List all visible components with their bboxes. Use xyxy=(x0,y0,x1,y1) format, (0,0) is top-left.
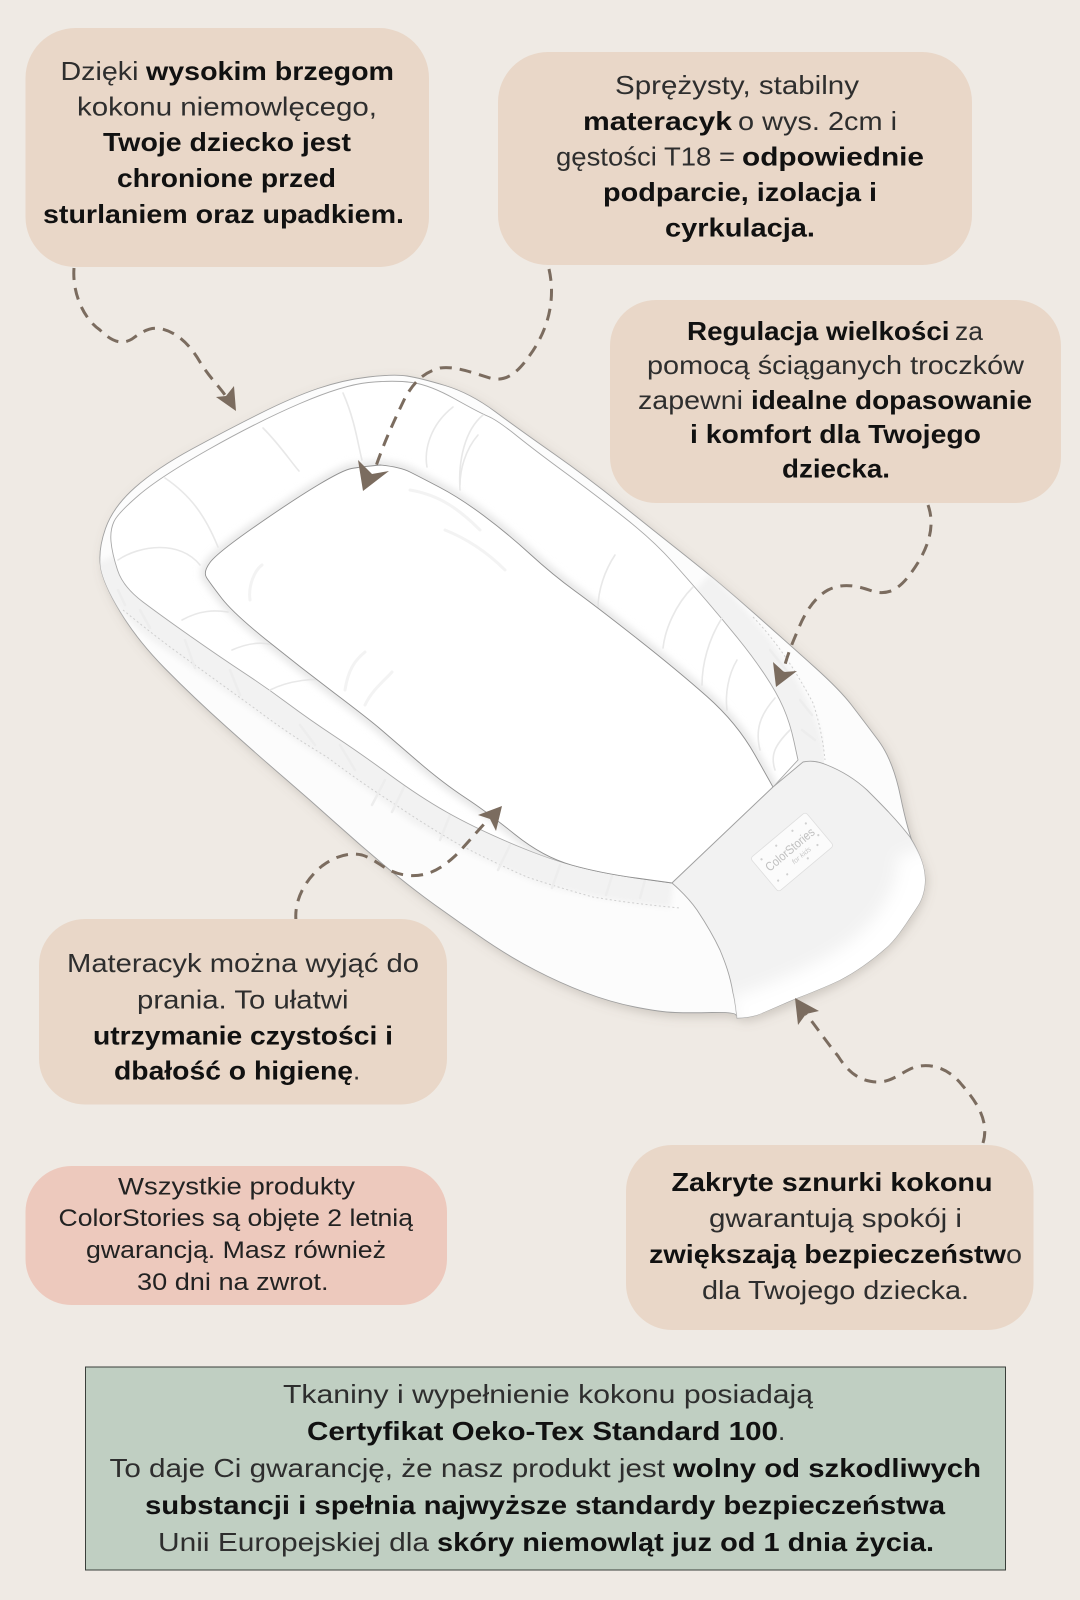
text: mattress: Sprężysty, stabilny xyxy=(615,70,859,100)
text: high edges: kokonu niemowlęcego, xyxy=(77,92,377,122)
text: size regulation xyxy=(638,316,1032,484)
text: hidden strings xyxy=(649,1167,1022,1305)
text: mattress: podparcie, izolacja i xyxy=(603,177,877,207)
text: warranty: Wszystkie produkty xyxy=(118,1174,355,1200)
text: mattress: gęstości T18 = xyxy=(556,142,735,172)
text: washable mattress: dbałość o higienę xyxy=(114,1056,353,1086)
text: washable mattress: Materacyk można wyjąć do xyxy=(67,948,419,978)
arrow: washable mattress callout xyxy=(296,806,502,921)
text: certificate: Unii Europejskiej dla xyxy=(158,1527,430,1557)
stitching xyxy=(123,610,825,908)
text: hidden strings: dla Twojego dziecka. xyxy=(702,1275,969,1305)
text: high edges: wysokim brzegom xyxy=(145,56,394,86)
text: certificate: Certyfikat Oeko-Tex Standard 100 xyxy=(307,1416,778,1446)
panel: warranty xyxy=(26,1166,447,1305)
text: mattress: materacyk xyxy=(583,106,733,136)
arrow: mattress callout to mattress xyxy=(358,269,552,491)
panel: mattress xyxy=(498,52,972,265)
text: high edges: chronione przed xyxy=(117,163,336,193)
panel: size regulation xyxy=(610,300,1061,503)
text: warranty: 30 dni na zwrot. xyxy=(137,1269,328,1296)
text: size regulation: i komfort dla Twojego xyxy=(690,419,981,449)
text: size regulation: zapewni xyxy=(638,385,743,415)
closing flap xyxy=(672,761,925,1020)
mattress xyxy=(205,465,773,883)
text: mattress xyxy=(556,70,924,242)
brand label xyxy=(750,812,834,892)
text: high edges: Dzięki xyxy=(60,56,138,86)
illustration: baby cocoon xyxy=(100,375,925,1020)
text: hidden strings: zwiększają bezpieczeństw o xyxy=(649,1239,1022,1269)
text: certificate: . xyxy=(778,1416,785,1446)
panel: Oeko-Tex certificate xyxy=(86,1367,1006,1570)
arrow: hidden strings callout xyxy=(795,998,985,1143)
cocoon outer body xyxy=(100,375,924,1017)
text: warranty: ColorStories są objęte 2 letnią xyxy=(58,1205,414,1232)
text: certificate: Tkaniny i wypełnienie kokonu posiadają xyxy=(283,1379,814,1409)
text: washable mattress: prania. To ułatwi xyxy=(137,984,348,1014)
text: washable mattress: utrzymanie czystości i xyxy=(93,1020,393,1050)
text: mattress: cyrkulacja. xyxy=(665,212,815,242)
text: warranty: gwarancją. Masz również xyxy=(86,1237,386,1264)
text: hidden strings: gwarantują spokój i xyxy=(709,1203,962,1233)
text: certificate: skóry niemowląt juz od 1 dnia życia. xyxy=(437,1527,934,1557)
brand label: ColorStories xyxy=(763,825,818,874)
text: hidden strings: Zakryte sznurki kokonu xyxy=(672,1167,992,1197)
arrow: size regulation callout xyxy=(773,505,931,687)
text: high edges: Twoje dziecko jest xyxy=(103,127,351,157)
panel: hidden strings xyxy=(626,1145,1034,1330)
mattress soft creases xyxy=(250,490,505,705)
text: size regulation: za xyxy=(955,316,984,346)
text: mattress: o wys. 2cm i xyxy=(738,106,897,136)
text: size regulation: pomocą ściąganych troczków xyxy=(647,350,1024,380)
gathered folds xyxy=(118,590,815,898)
text: size regulation: Regulacja wielkości xyxy=(687,316,950,346)
text: high edges xyxy=(43,56,404,229)
text: size regulation: dziecka. xyxy=(782,454,890,484)
text: mattress: odpowiednie xyxy=(742,142,924,172)
text: high edges: sturlaniem oraz upadkiem. xyxy=(43,199,404,229)
panel: high edges xyxy=(26,28,429,267)
text: size regulation: idealne dopasowanie xyxy=(751,385,1032,415)
panel: washable mattress xyxy=(39,919,447,1104)
text: washable mattress: . xyxy=(353,1056,360,1086)
arrow: rim callout to bumper xyxy=(74,268,236,411)
text: warranty xyxy=(58,1174,414,1296)
text: certificate xyxy=(110,1379,981,1557)
text: certificate: To daje Ci gwarancję, że nasz produkt jest xyxy=(110,1453,666,1483)
text: certificate: wolny od szkodliwych xyxy=(672,1453,981,1483)
bumper folds xyxy=(118,393,790,770)
text: washable mattress xyxy=(67,948,419,1086)
mattress edge shadow xyxy=(205,465,773,883)
text: certificate: substancji i spełnia najwyższe standardy bezpieczeństwa xyxy=(145,1490,946,1520)
brand label: for kids xyxy=(791,846,813,866)
padded bumper xyxy=(111,381,798,883)
lower gathered band xyxy=(105,560,812,893)
